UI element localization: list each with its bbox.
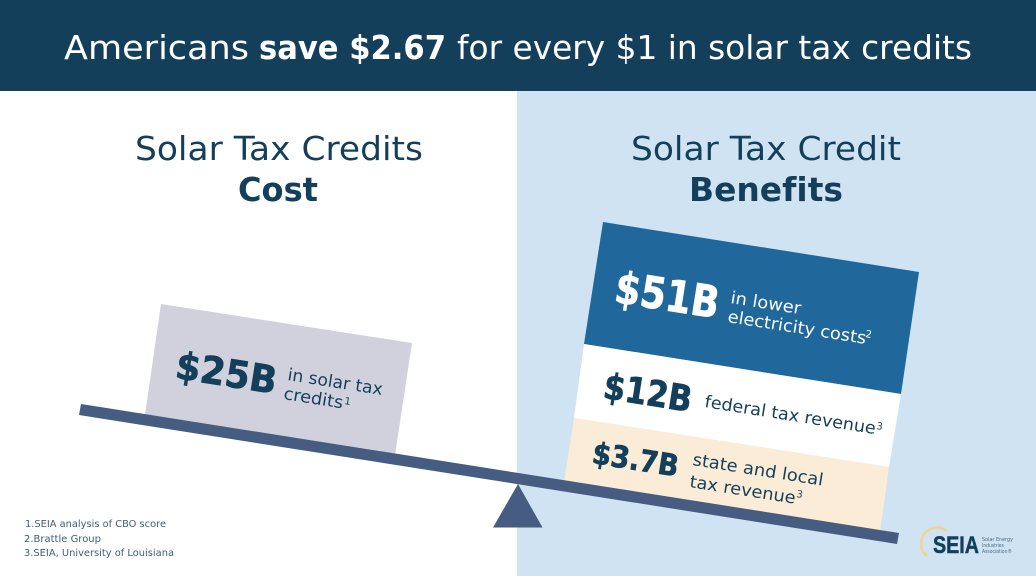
benefit: lower electricity costs: $51B [611,262,723,329]
heading: cost: Solar Tax Credits [135,129,423,168]
benefit: federal tax revenue: $12B [601,366,695,421]
SEIA logo: SEIA [933,532,979,559]
cost box: in solar tax [286,365,384,400]
cost box: credits [282,384,345,413]
benefit: lower electricity costs [584,222,919,394]
benefit: state and local tax revenue [564,418,889,532]
fulcrum triangle [493,484,542,528]
heading: cost: Cost [238,170,318,209]
benefit: federal tax revenue: 3 [876,421,884,433]
footnotes: 3.SEIA, University of Louisiana [24,548,174,559]
SEIA logo [921,527,1013,559]
heading: benefits: Benefits [689,170,843,209]
cost box: 1 [344,396,352,408]
SEIA logo: Association® [982,548,1012,555]
panel: benefits background [517,91,1036,576]
cost box [145,304,412,455]
balance beam [79,404,899,544]
SEIA logo: Industries [982,543,1004,549]
footnotes [24,519,174,559]
benefit: lower electricity costs: electricity costs [726,307,868,349]
heading: cost [135,129,423,209]
benefit: federal tax revenue [574,344,901,467]
benefit: state and local tax revenue: 3 [796,489,804,501]
benefit: state and local tax revenue: tax revenue [688,472,797,509]
footnotes: 2.Brattle Group [24,534,101,545]
SEIA logo: Solar Energy [982,537,1013,543]
heading: benefits: Solar Tax Credit [631,129,901,168]
title banner: save $2.67 [259,28,446,67]
title banner: for every $1 in solar tax credits [457,28,972,67]
cost box: $25B [173,343,280,403]
title banner [0,0,1036,91]
benefit: lower electricity costs: 2 [865,329,873,341]
heading: benefits [631,129,901,209]
benefit: state and local tax revenue: state and local [691,450,825,491]
title banner: Americans [64,28,249,67]
benefit: state and local tax revenue: $3.7B [590,436,681,485]
footnotes: 1.SEIA analysis of CBO score [25,519,166,530]
benefit: lower electricity costs: in lower [729,288,802,319]
benefit: federal tax revenue: federal tax revenue [703,392,877,439]
